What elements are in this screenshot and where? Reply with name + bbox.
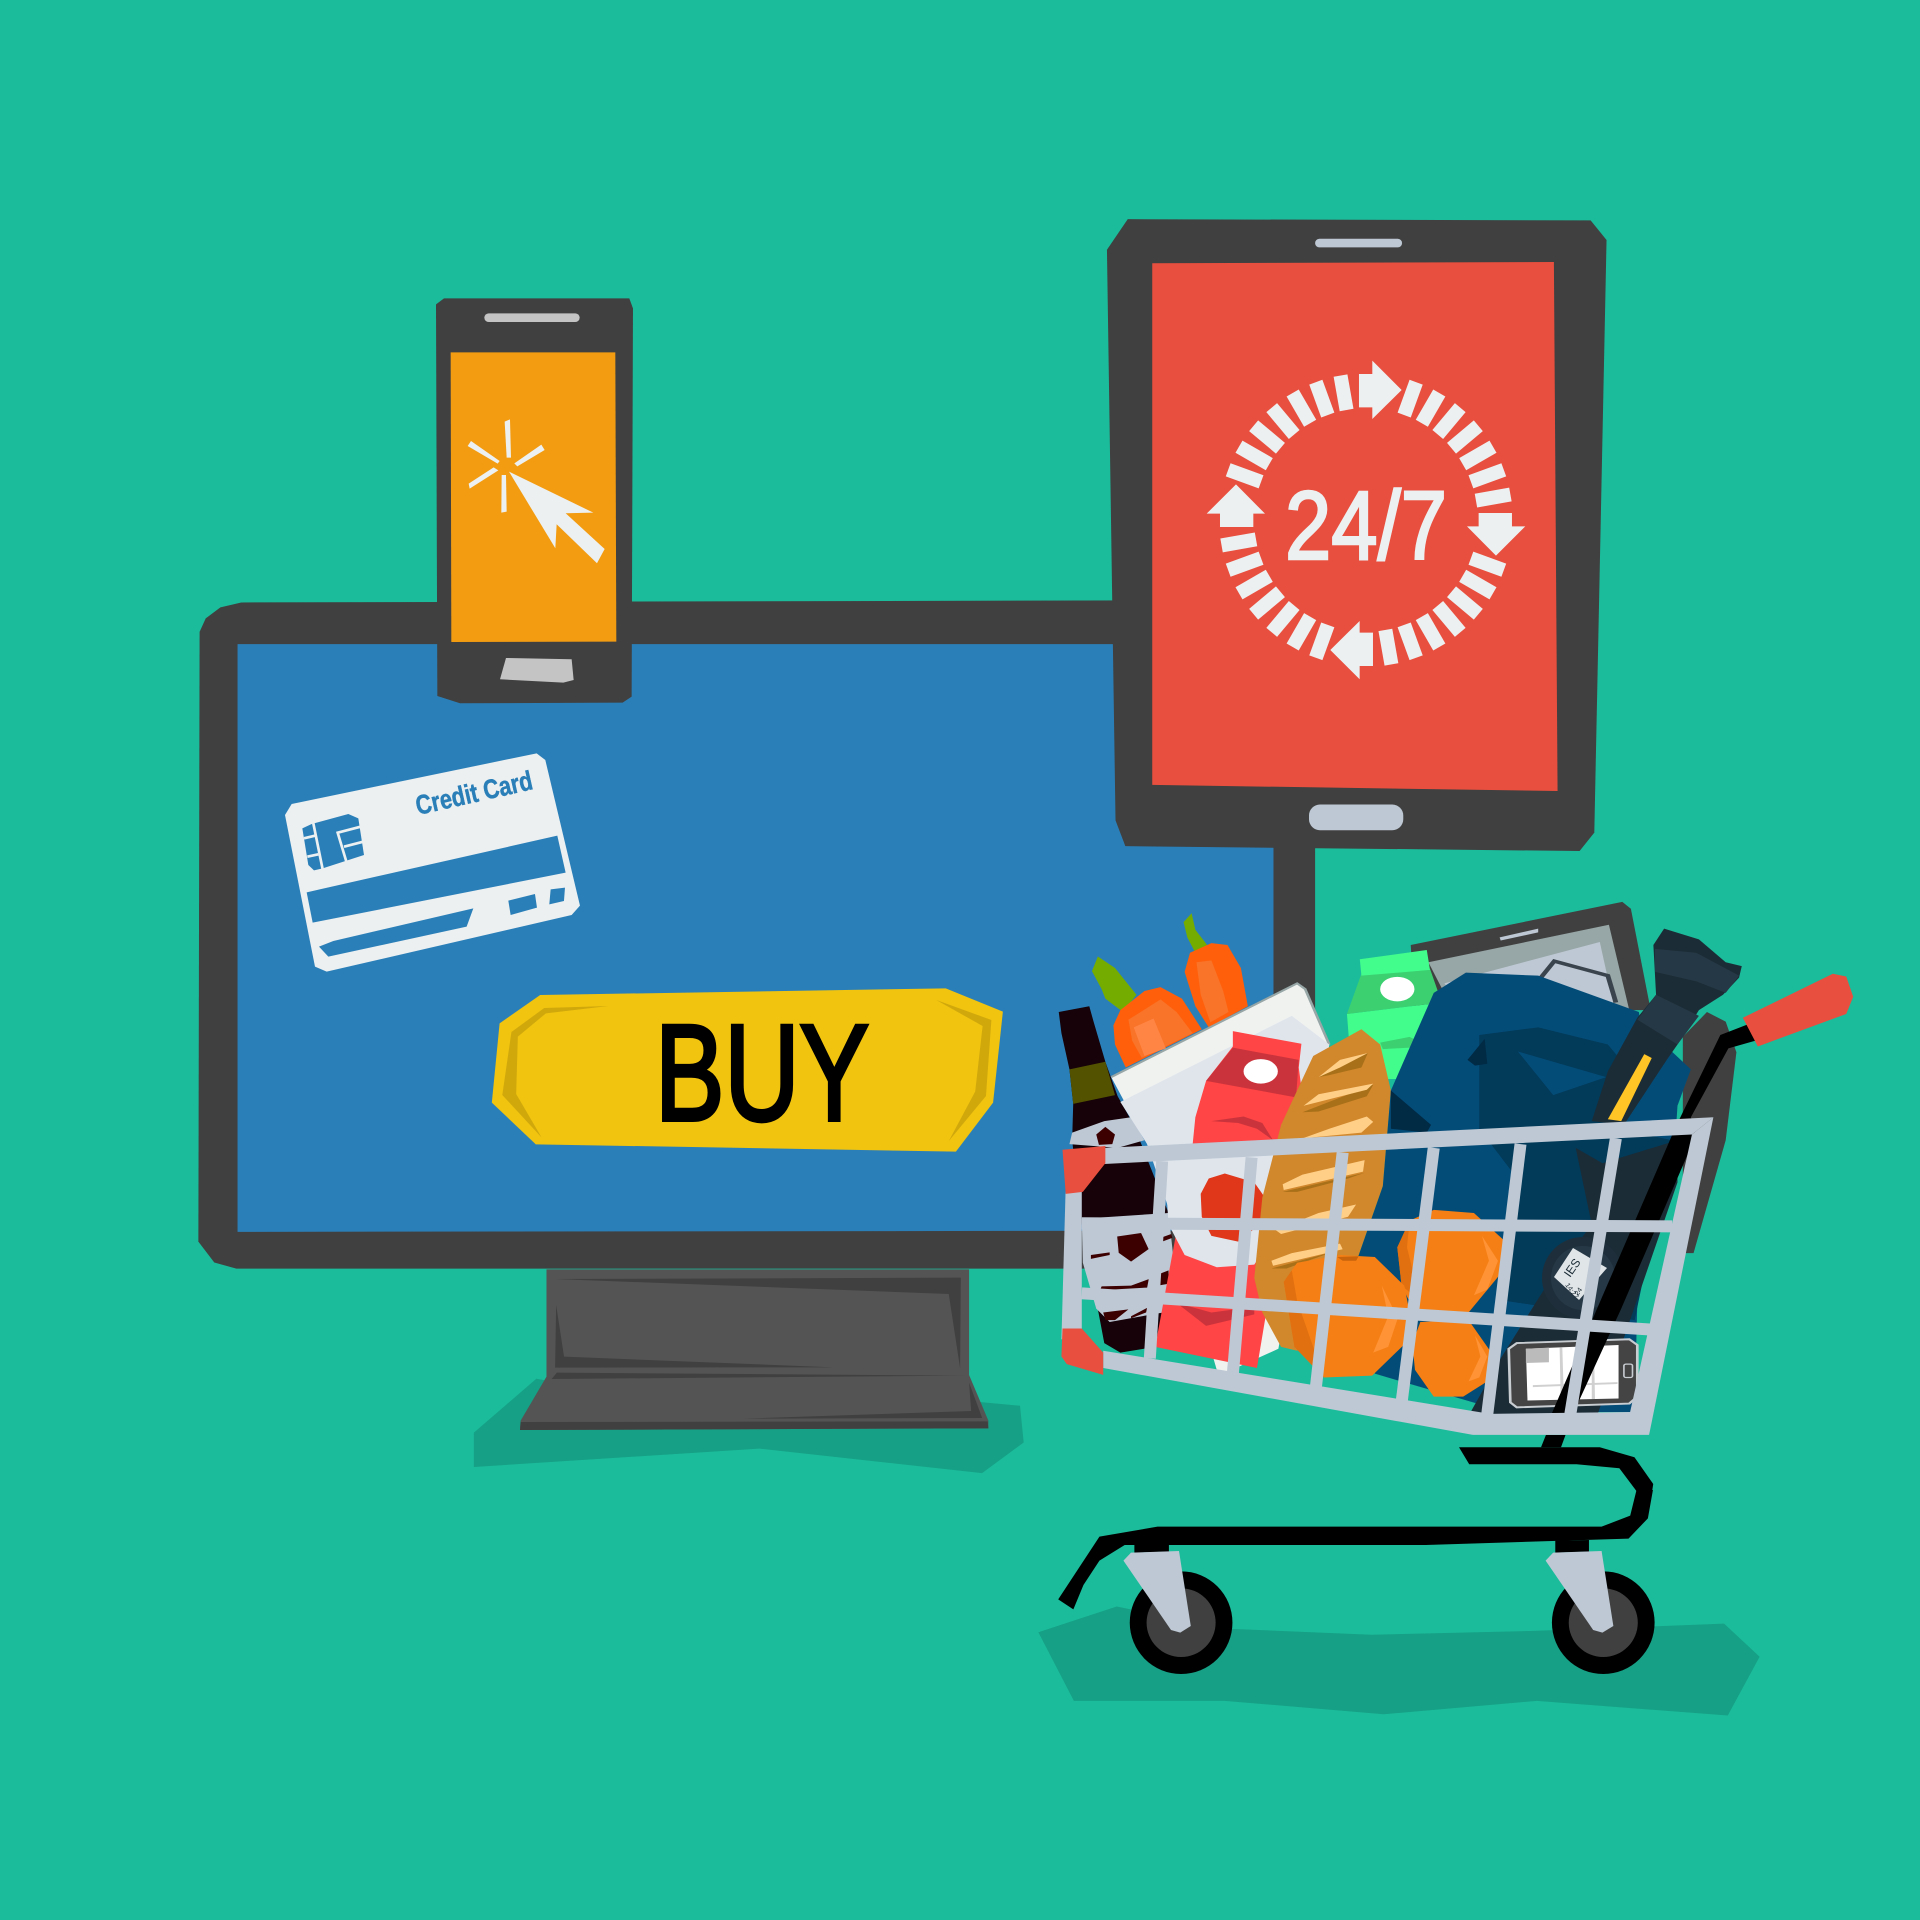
mobile phone [1509, 1339, 1637, 1407]
sport watch: 24 [1574, 1287, 1584, 1297]
icon: click cursor [468, 419, 605, 563]
sport watch [1542, 1237, 1624, 1319]
cart base and wheels [1058, 1490, 1655, 1674]
cart frame [1058, 974, 1853, 1674]
icon: 24/7 ring [1207, 361, 1525, 679]
icon: 24/7 ring: 24/7 [1285, 471, 1447, 580]
monitor [198, 600, 1315, 1269]
shopping cart [1058, 902, 1853, 1674]
green carton [1347, 950, 1442, 1079]
orange left [1284, 1255, 1410, 1378]
carrot right [1184, 913, 1248, 1027]
box with apple [1111, 983, 1329, 1372]
tablet in cart [1411, 902, 1651, 1010]
credit card: Credit Card [413, 765, 535, 821]
wheel right [1546, 1551, 1655, 1674]
carrot left [1092, 957, 1202, 1068]
baguette [1254, 1029, 1391, 1351]
wheel left [1123, 1551, 1232, 1674]
cart contents [1059, 902, 1742, 1416]
smartphone [436, 298, 633, 703]
sport watch: IES [1561, 1256, 1584, 1280]
tablet [1107, 219, 1607, 851]
orange upper right [1397, 1210, 1503, 1312]
flashlight and strap [1469, 929, 1742, 1416]
blue backpack [1356, 973, 1691, 1412]
handle panel behind cart [1683, 1012, 1736, 1253]
shadow: monitor [474, 1379, 1024, 1473]
shadow: cart [1038, 1607, 1760, 1716]
orange lower right [1412, 1320, 1493, 1397]
buy button [492, 988, 1003, 1152]
buy button: BUY [655, 997, 869, 1150]
sport watch: 14:27 [1563, 1282, 1579, 1301]
cart wire grid [1061, 1117, 1713, 1435]
wine bottle [1059, 1006, 1174, 1353]
cart base upper [1459, 1435, 1653, 1500]
red carton [1155, 1031, 1302, 1368]
cart handle bar [1552, 974, 1853, 1414]
credit card [285, 753, 580, 972]
monitor stand [520, 1269, 988, 1430]
